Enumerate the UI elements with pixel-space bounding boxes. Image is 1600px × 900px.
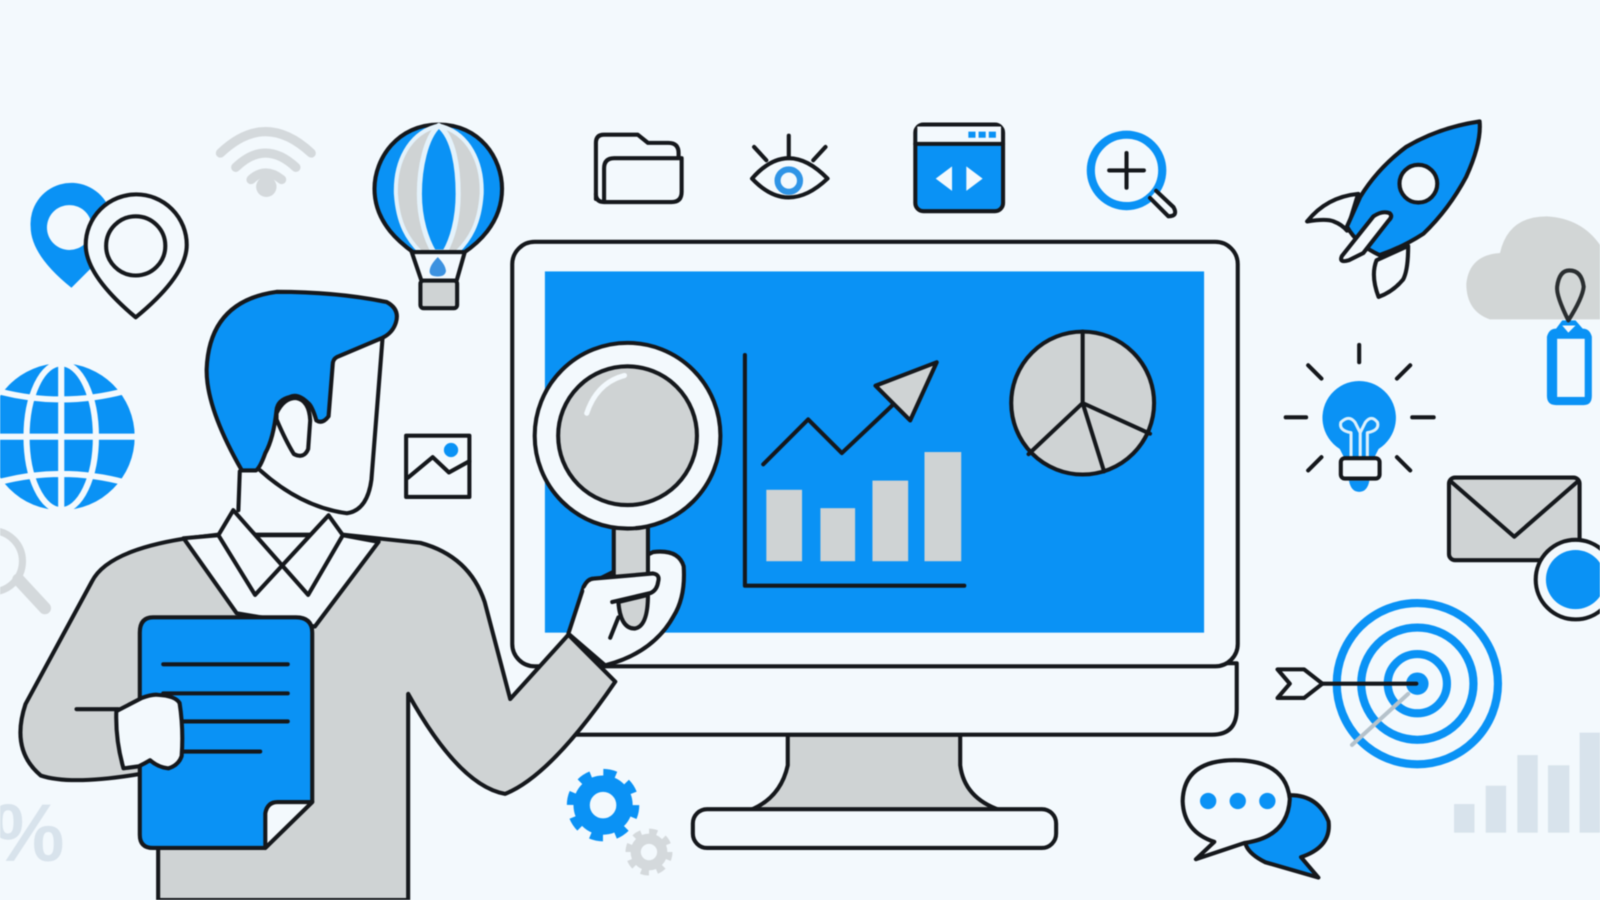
rocket icon — [1307, 121, 1480, 297]
hair — [207, 292, 397, 470]
zoom icon — [1091, 135, 1175, 216]
wifi icon — [220, 132, 311, 197]
shirt V — [184, 535, 379, 627]
hand holding magnifier — [568, 552, 684, 665]
speech bubbles — [1183, 760, 1329, 878]
document — [140, 617, 312, 848]
location pins — [31, 183, 187, 317]
globe icon — [0, 363, 135, 510]
body with sweater — [20, 535, 615, 900]
fingers — [584, 573, 659, 607]
light bulb icon — [1286, 345, 1434, 492]
eye icon — [752, 136, 828, 197]
folder icon — [596, 135, 682, 202]
person — [20, 292, 720, 900]
face — [260, 337, 383, 513]
faded bar chart — [1454, 733, 1600, 833]
cloud icon — [1466, 216, 1600, 319]
collar — [218, 510, 343, 595]
monitor — [512, 242, 1238, 848]
faded search icon — [0, 531, 45, 608]
gears — [571, 773, 669, 872]
pie chart — [1011, 332, 1154, 474]
magnifying glass — [535, 343, 720, 580]
code window icon — [915, 124, 1003, 211]
picture icon — [406, 436, 469, 497]
hot air balloon — [374, 124, 502, 308]
price tag icon — [1547, 270, 1592, 405]
ear — [277, 398, 310, 456]
hand holding document — [116, 695, 182, 768]
envelope icon — [1449, 478, 1580, 560]
neck — [238, 470, 347, 515]
target and arrow — [1278, 603, 1498, 764]
line and bar chart — [745, 355, 964, 586]
blue circle badge — [1536, 540, 1600, 619]
